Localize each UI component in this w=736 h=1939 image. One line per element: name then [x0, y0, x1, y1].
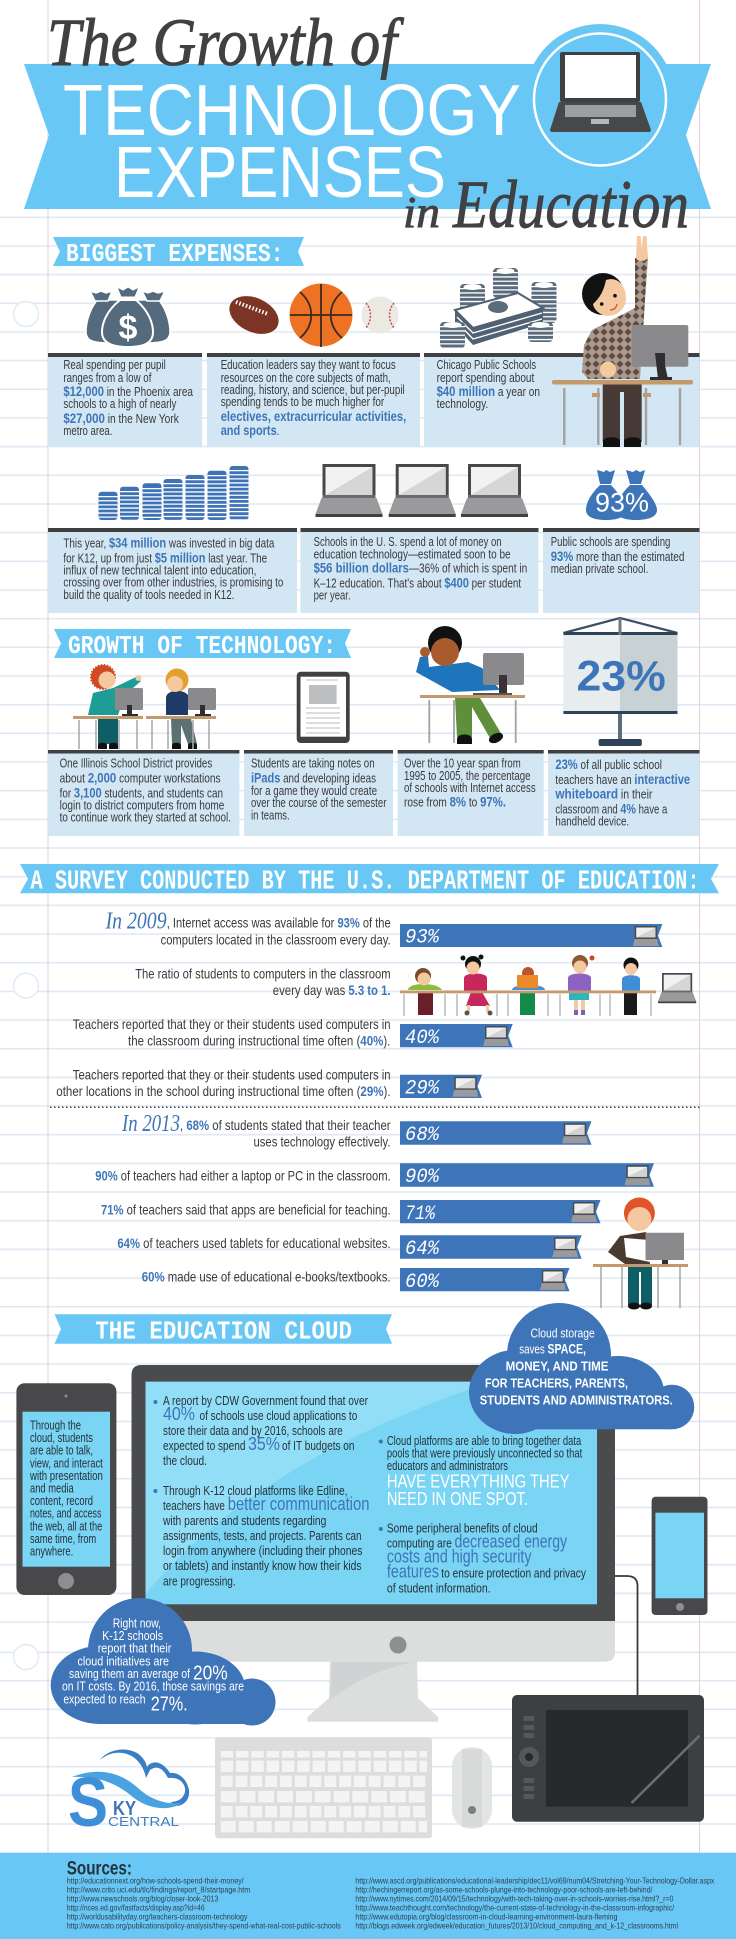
text: education leaders: reading, history, and science, but per-pupil	[221, 383, 405, 397]
cloud: savings: expected to reach	[63, 1691, 146, 1706]
text: through the cloud: the web, all at the	[30, 1518, 102, 1533]
text: 60%: 60% made use of educational e-books/textbooks.	[142, 1269, 391, 1285]
bar: 93%: 93%	[405, 927, 440, 950]
text: sources left column: http://nces.ed.gov/fastfacts/display.asp?id=46	[67, 1903, 205, 1913]
text: 2013 survey statement: , 68% of students stated that their teacher	[180, 1117, 391, 1133]
text: one spot: educators and administrators	[387, 1458, 508, 1473]
cloud: cloud storage: STUDENTS AND ADMINISTRATORS.	[480, 1392, 673, 1407]
text: sources left column: http://www.newschools.org/blog/closer-look-2013	[67, 1894, 219, 1904]
text: 2009 survey statement one	[105, 908, 391, 947]
text: illinois: login to district computers from home	[60, 798, 224, 812]
text: spending per pupil: metro area.	[63, 424, 112, 438]
bar: 40%	[400, 1024, 513, 1050]
title banner	[24, 4, 711, 242]
bar: 29%	[400, 1075, 482, 1100]
text: whiteboard	[555, 756, 690, 828]
text: big data: influx of new technical talent into education,	[63, 564, 256, 578]
text: big data: build the quality of tools needed in K12.	[63, 588, 234, 602]
panel: row two boxes	[48, 528, 700, 613]
illustration: boy at computer	[416, 626, 525, 745]
text: peripheral benefits: costs and high security	[387, 1547, 532, 1567]
text: through the cloud: notes, and access	[30, 1506, 102, 1521]
text: 93 percent: Public schools are spending	[551, 535, 670, 549]
cloud: savings: saving them an average of	[69, 1666, 190, 1681]
bar: 68%	[400, 1121, 592, 1147]
text: sources left column: http://www.crito.uci.edu/tlc/findings/report_8/startpage.htm	[67, 1885, 250, 1895]
icon: money bags	[86, 287, 170, 347]
title: Education: Education	[452, 166, 689, 242]
bar: 90%: 90%	[405, 1166, 440, 1189]
cloud: savings: 27%.	[151, 1694, 188, 1716]
text: sources left column: http://educationnext.org/how-schools-spend-their-money/	[67, 1876, 244, 1886]
text: one spot	[387, 1433, 582, 1509]
logo: sky central	[68, 1749, 189, 1841]
cloud: savings: on IT costs. By 2016, those savings are	[62, 1679, 244, 1694]
text: education leaders: Education leaders say they want to focus	[221, 358, 396, 372]
text: CDW report: store their data and by 2016, schools are	[163, 1423, 343, 1438]
text: big data: for K12, up from just $5 million last year. The	[63, 550, 267, 566]
bar: 71%	[400, 1200, 600, 1226]
icon: three laptops	[316, 464, 528, 517]
icon: sports balls	[223, 284, 398, 347]
text: chicago: report spending about	[437, 371, 535, 385]
text: 2009 survey statement one: In 2009	[105, 908, 167, 934]
illustration: student raising hand	[552, 236, 693, 447]
text: internet access: of schools with Internet access	[404, 781, 536, 795]
text: spending per pupil: $12,000 in the Phoenix area	[63, 383, 193, 399]
heading: biggest expenses: BIGGEST EXPENSES:	[66, 239, 284, 269]
title: The Growth of: The Growth of	[47, 4, 404, 80]
text: chicago: $40 million a year on	[437, 383, 540, 399]
text: CDW report: 35%	[248, 1434, 280, 1454]
text: peripheral benefits: to ensure protection and privacy	[441, 1566, 586, 1581]
bar: 60%	[400, 1268, 570, 1294]
text: education leaders: spending tends to be much higher for	[221, 395, 384, 409]
illustration: large monitor	[132, 1365, 615, 1722]
text: 56 billion	[314, 535, 527, 603]
text: CDW report: the cloud.	[163, 1453, 207, 1468]
text: sources right column	[355, 1876, 715, 1930]
device: keyboard	[215, 1737, 432, 1838]
bar: 68%: 68%	[405, 1124, 440, 1147]
text: better communication: with parents and students regarding	[162, 1513, 326, 1528]
text: through the cloud: content, record	[30, 1493, 93, 1508]
text: illinois: about 2,000 computer workstations	[60, 770, 221, 786]
text: other locations: Teachers reported that they or their students used computers in	[73, 1066, 391, 1082]
bar: 93%	[400, 924, 662, 950]
heading: growth of technology: GROWTH OF TECHNOLOGY:	[68, 631, 336, 661]
text: classroom use: the classroom during instructional time often (40%).	[128, 1033, 390, 1049]
cloud: savings: report that their	[98, 1641, 172, 1656]
text: through the cloud: and media	[30, 1480, 74, 1495]
text: CDW report: A report by CDW Government found that over	[163, 1393, 369, 1408]
text: one spot: Cloud platforms are able to bring together data	[387, 1433, 582, 1448]
title: Expenses: EXPENSES	[114, 133, 446, 213]
text: ratio of students	[135, 965, 391, 998]
text: one spot: HAVE EVERYTHING THEY	[387, 1472, 570, 1492]
cloud: cloud storage: FOR TEACHERS, PARENTS,	[485, 1375, 628, 1390]
text: through the cloud: with presentation	[29, 1468, 103, 1483]
text: peripheral benefits: decreased energy	[454, 1532, 567, 1552]
text: peripheral benefits	[387, 1521, 586, 1596]
logo: sky central: S	[68, 1763, 108, 1841]
icon: 93% money bags	[586, 470, 657, 520]
bar: 64%	[400, 1235, 582, 1261]
text: better communication: teachers have	[163, 1498, 225, 1513]
cloud: cloud storage	[469, 1303, 694, 1434]
text: other locations: other locations in the school during instructional time often (29%).	[56, 1083, 391, 1099]
text: through the cloud: cloud, students	[30, 1430, 93, 1445]
text: through the cloud: same time, from	[30, 1531, 96, 1546]
logo: sky central: KY	[113, 1798, 137, 1820]
cloud: savings: K-12 schools	[102, 1628, 163, 1643]
text: one spot: pools that were previously unconnected so that	[387, 1446, 582, 1461]
text: ipads: for a game they would create	[251, 784, 377, 798]
icon: growing coin stacks	[98, 466, 248, 520]
cloud: savings: cloud initiatives are	[78, 1653, 169, 1668]
bar: 60%: 60%	[405, 1271, 440, 1294]
text: CDW report: 40%	[163, 1404, 195, 1424]
text: through the cloud	[29, 1417, 103, 1558]
text: better communication: are progressing.	[163, 1573, 236, 1588]
text: illinois: to continue work they started at school.	[60, 811, 231, 825]
panel: sources	[0, 1853, 736, 1939]
text: illinois: One Illinois School District provides	[60, 757, 212, 771]
icon: 93% money bags: 93%	[595, 488, 649, 518]
text: better communication: or tablets) and instantly know how their kids	[163, 1558, 362, 1573]
icon: money bags: $	[119, 309, 138, 347]
text: sources right column: http://www.edutopia.org/blog/classroom-in-cloud-learning-environment-laura-fleming	[355, 1912, 618, 1922]
text: education leaders	[221, 358, 406, 438]
illustration: five students and one laptop	[400, 954, 696, 1016]
cloud: savings: 20%	[193, 1662, 228, 1684]
text: 56 billion: Schools in the U. S. spend a lot of money on	[314, 535, 502, 549]
text: whiteboard: 23% of all public school	[555, 756, 662, 772]
text: better communication: Through K-12 cloud platforms like Edline,	[163, 1483, 347, 1498]
text: peripheral benefits: of student information.	[387, 1581, 491, 1596]
panel: row one boxes	[48, 353, 700, 447]
text: through the cloud: anywhere.	[30, 1543, 73, 1558]
cloud: cloud storage: Cloud storage	[530, 1325, 595, 1340]
text: better communication: better communication	[228, 1494, 370, 1514]
text: sources right column: http://www.teachthought.com/technology/the-current-state-of-technology-in-the-classroom-infographic/	[355, 1903, 675, 1913]
bar: 90%	[400, 1163, 654, 1189]
text: education leaders: resources on the core subjects of math,	[221, 371, 391, 385]
text: 71%: 71% of teachers said that apps are beneficial for teaching.	[101, 1201, 391, 1217]
text: whiteboard: whiteboard in their	[555, 785, 652, 801]
illustration: teacher with book	[593, 1198, 688, 1310]
text: chicago: technology.	[437, 397, 488, 411]
text: internet access	[404, 757, 536, 810]
text: 2013 survey statement: uses technology effectively.	[254, 1134, 390, 1150]
text: ratio of students: every day was 5.3 to 1.	[273, 982, 391, 998]
text: better communication: assignments, tests, and projects. Parents can	[163, 1528, 362, 1543]
heading: sources: Sources:	[67, 1858, 132, 1879]
text: big data: This year, $34 million was invested in big data	[63, 535, 274, 551]
device: mouse	[452, 1747, 492, 1829]
text: spending per pupil: $27,000 in the New York	[63, 410, 180, 426]
panel: row three boxes	[48, 750, 700, 836]
device: drawing tablet	[512, 1695, 704, 1822]
text: classroom use	[73, 1016, 391, 1049]
text: sources left column: http://www.cato.org/publications/policy-analysis/they-spend-what-real-cost-public-schools	[67, 1920, 341, 1930]
text: chicago: Chicago Public Schools	[437, 358, 536, 372]
illustration: two students at desks	[73, 665, 216, 749]
text: better communication: login from anywhere (including their phones	[163, 1543, 363, 1558]
text: 56 billion: K–12 education. That's about $400 per student	[314, 575, 522, 591]
cloud: savings	[51, 1598, 276, 1726]
text: ipads: iPads and developing ideas	[251, 770, 376, 786]
text: 56 billion: per year.	[314, 589, 351, 603]
cloud: cloud storage: saves SPACE,	[519, 1341, 586, 1357]
icon: tablet	[297, 672, 350, 743]
text: sources right column: http://www.nytimes.com/2014/09/15/technology/with-tech-taking-over-in-schools-worries-rise.html?_r=0	[355, 1894, 674, 1904]
heading: the education cloud: THE EDUCATION CLOUD	[95, 1316, 352, 1346]
text: ipads	[251, 757, 386, 822]
device: left tablet	[16, 1383, 116, 1595]
text: 93 percent	[551, 535, 685, 576]
text: big data: crossing over from other industries, is promising to	[63, 576, 283, 590]
text: better communication	[162, 1483, 370, 1588]
text: internet access: rose from 8% to 97%.	[404, 794, 506, 810]
bar: 40%: 40%	[405, 1027, 440, 1050]
text: 90%: 90% of teachers had either a laptop or PC in the classroom.	[95, 1168, 391, 1184]
text: 93 percent: median private school.	[551, 562, 648, 576]
text: ipads: in teams.	[251, 808, 290, 822]
title: Technology: TECHNOLOGY	[63, 71, 521, 151]
bar: 71%: 71%	[405, 1203, 436, 1226]
text: 64%: 64% of teachers used tablets for educational websites.	[117, 1235, 391, 1251]
title: in: in	[403, 188, 440, 237]
device: right phone and cable	[615, 1497, 708, 1695]
text: internet access: Over the 10 year span from	[404, 757, 521, 771]
logo: sky central: CENTRAL	[108, 1814, 179, 1829]
text: whiteboard: teachers have an interactive	[555, 771, 690, 787]
text: 2013 survey statement: In 2013	[121, 1111, 180, 1137]
text: through the cloud: are able to talk,	[30, 1443, 93, 1458]
text: spending per pupil: Real spending per pupil	[63, 358, 166, 372]
text: education leaders: electives, extracurricular activities,	[221, 408, 406, 424]
text: spending per pupil: schools to a high of nearly	[63, 397, 177, 411]
icon: laptop in circle	[525, 24, 675, 174]
text: 56 billion: $56 billion dollars—36% of which is spent in	[314, 560, 527, 576]
text: through the cloud: view, and interact	[30, 1455, 103, 1470]
text: 56 billion: education technology—estimated soon to be	[314, 547, 511, 561]
illustration: projector screen 23%	[563, 618, 678, 746]
text: classroom use: Teachers reported that they or their students used computers in	[73, 1016, 391, 1032]
text: chicago	[437, 358, 540, 411]
text: CDW report: of schools use cloud applications to	[200, 1408, 357, 1423]
text: illinois	[60, 757, 231, 825]
text: one spot: NEED IN ONE SPOT.	[387, 1489, 528, 1509]
text: ipads: over the course of the semester	[251, 796, 386, 810]
text: through the cloud: Through the	[30, 1417, 81, 1432]
text: big data	[63, 535, 283, 602]
text: 2013 survey statement	[121, 1111, 391, 1150]
text: peripheral benefits: features	[387, 1562, 439, 1582]
cloud: cloud storage: MONEY, AND TIME	[506, 1359, 609, 1374]
text: 93 percent: 93% more than the estimated	[551, 548, 685, 564]
text: spending per pupil	[63, 358, 193, 438]
text: whiteboard: classroom and 4% have a	[555, 800, 667, 816]
cloud: savings: Right now,	[113, 1615, 161, 1630]
text: whiteboard: handheld device.	[555, 814, 629, 828]
text: 2009 survey statement one: , Internet access was available for 93% of the	[167, 914, 391, 930]
bar: 64%: 64%	[405, 1238, 440, 1261]
text: internet access: 1995 to 2005, the percentage	[404, 769, 531, 783]
illustration: projector screen 23%: 23%	[576, 653, 666, 701]
icon: stacks of money	[440, 268, 556, 348]
bar: 29%: 29%	[405, 1078, 440, 1100]
text: peripheral benefits: Some peripheral benefits of cloud	[387, 1521, 538, 1536]
text: sources right column: http://hechingerreport.org/as-some-schools-plunge-into-technology-poor-schools-are-left-behind/	[355, 1885, 653, 1895]
text: illinois: for 3,100 students, and students can	[60, 784, 223, 800]
text: spending per pupil: ranges from a low of	[63, 371, 152, 385]
text: sources left column: http://worldusabilityday.org/teachers-classroom-technology	[67, 1912, 248, 1922]
text: ratio of students: The ratio of students to computers in the classroom	[135, 965, 391, 981]
text: education leaders: and sports.	[221, 422, 279, 438]
text: CDW report: expected to spend	[163, 1438, 246, 1453]
text: sources left column	[67, 1876, 341, 1930]
text: ipads: Students are taking notes on	[251, 757, 375, 771]
text: peripheral benefits: computing are	[387, 1536, 452, 1551]
text: other locations	[56, 1066, 391, 1099]
text: CDW report	[163, 1393, 369, 1468]
text: 2009 survey statement one: computers located in the classroom every day.	[161, 931, 391, 947]
text: CDW report: of IT budgets on	[282, 1438, 354, 1453]
